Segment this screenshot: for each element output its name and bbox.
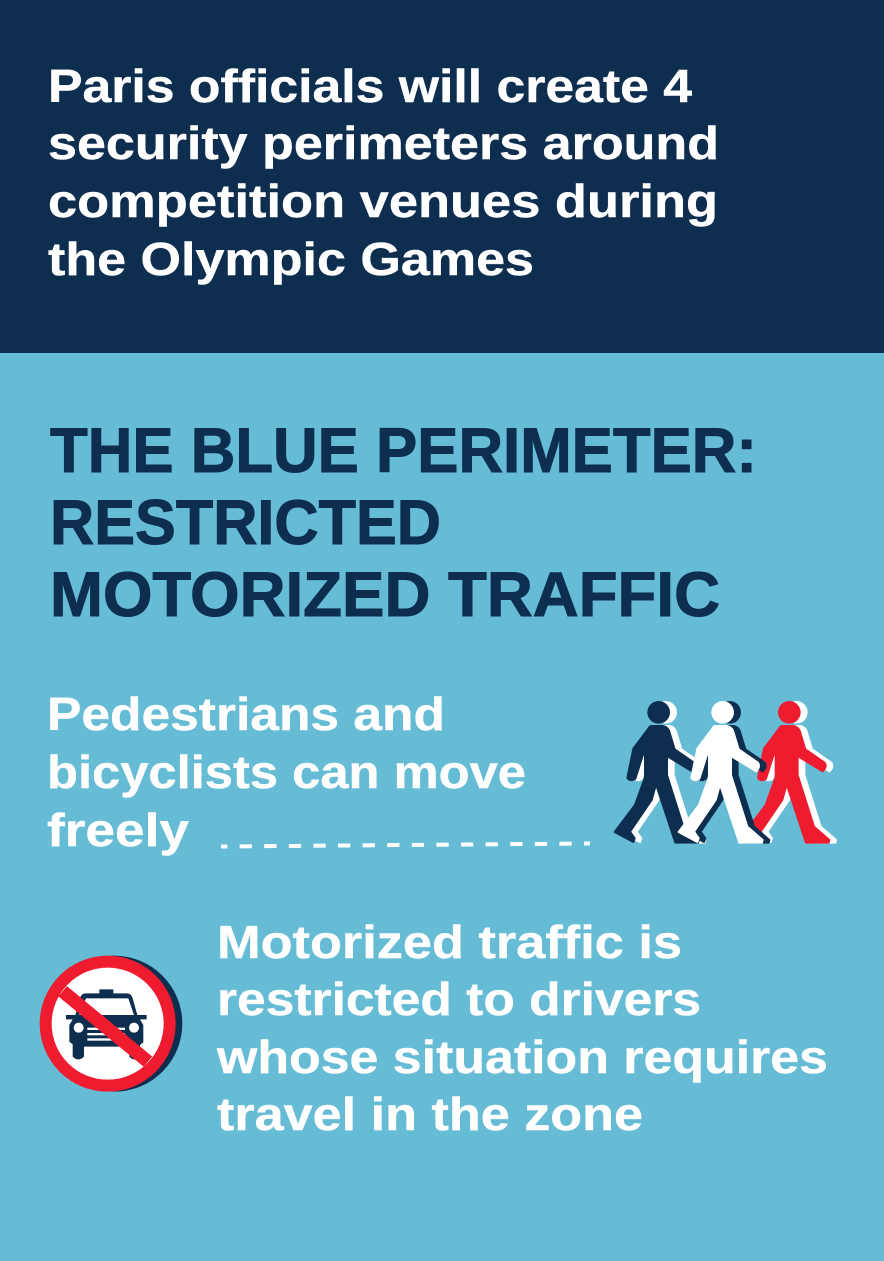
icon: no motor traffic sign <box>40 956 182 1092</box>
header text: security perimeters around <box>48 117 719 169</box>
header text: Paris officials will create 4 <box>48 60 692 112</box>
text: motorized traffic: Motorized traffic is <box>217 916 682 968</box>
header text: competition venues during <box>48 175 718 227</box>
heading: the blue perimeter <box>50 416 757 630</box>
text: pedestrians and bicyclists: Pedestrians and <box>47 688 445 740</box>
header panel <box>0 0 884 353</box>
red walker <box>745 701 836 843</box>
white walker <box>679 701 769 843</box>
text: pedestrians and bicyclists: bicyclists can move <box>47 746 526 798</box>
heading: the blue perimeter: MOTORIZED TRAFFIC <box>50 560 720 630</box>
header text <box>48 60 719 285</box>
text: motorized traffic <box>216 916 828 1140</box>
header text: the Olympic Games <box>48 233 534 285</box>
text: motorized traffic: restricted to drivers <box>217 973 701 1025</box>
navy walker <box>615 701 705 843</box>
text: pedestrians and bicyclists <box>47 688 526 856</box>
text: motorized traffic: whose situation requires <box>216 1031 828 1083</box>
dashed leader line <box>221 844 590 846</box>
heading: the blue perimeter: THE BLUE PERIMETER: <box>50 416 757 486</box>
prohibition bar <box>63 991 148 1062</box>
text: motorized traffic: travel in the zone <box>217 1088 643 1140</box>
taxi <box>66 989 147 1059</box>
text: pedestrians and bicyclists: freely <box>47 804 189 856</box>
icon: three walking people <box>615 701 836 843</box>
heading: the blue perimeter: RESTRICTED <box>50 488 441 558</box>
